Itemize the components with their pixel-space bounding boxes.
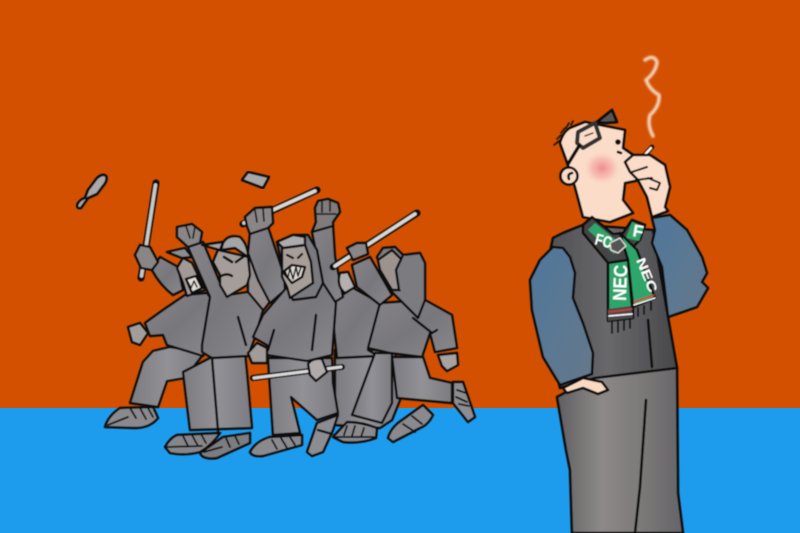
scarf: FC [593, 231, 614, 252]
thrown brick [242, 172, 269, 188]
skin patch between figures [248, 255, 275, 312]
hooligan right: legs and shoes [352, 353, 475, 442]
trouser crease [635, 400, 646, 533]
man with scarf smoking [530, 110, 708, 533]
scarf: NEC [633, 256, 661, 295]
right sleeve [652, 215, 708, 317]
hooligan left: upper body [128, 245, 212, 356]
fist holding right baton [347, 243, 368, 260]
left sleeve [530, 247, 593, 385]
hooligan with cap: upper body [177, 224, 263, 358]
hand on hip [563, 378, 608, 394]
cigarette [638, 147, 652, 162]
hand on lower baton [308, 359, 327, 381]
hooligan left: leg and shoe [105, 347, 205, 428]
scarf: NEC [610, 264, 632, 301]
hooligan centre with teeth: upper body [245, 207, 336, 363]
vest zipper [648, 320, 652, 367]
baton raised left [141, 183, 156, 278]
background: orange wall [0, 0, 800, 408]
baton with raised fist [243, 190, 317, 224]
thrown bottle [77, 175, 107, 208]
baton lower [253, 367, 342, 378]
neck and head [554, 110, 640, 222]
hooligan right: hooded upper body [352, 247, 458, 371]
scarf: F [631, 221, 645, 242]
hooligan centre with teeth: legs and shoes [250, 358, 338, 456]
hooligan at back: body, arm and legs [312, 199, 400, 442]
scarf [583, 217, 661, 333]
trousers [557, 368, 683, 533]
baton right [333, 213, 417, 267]
background: blue floor [0, 408, 800, 533]
hooligan group [105, 183, 475, 458]
hooligan with cap: legs and shoes [165, 353, 252, 458]
vest [540, 225, 677, 388]
smoking hand [625, 155, 670, 217]
smoke [645, 57, 659, 136]
